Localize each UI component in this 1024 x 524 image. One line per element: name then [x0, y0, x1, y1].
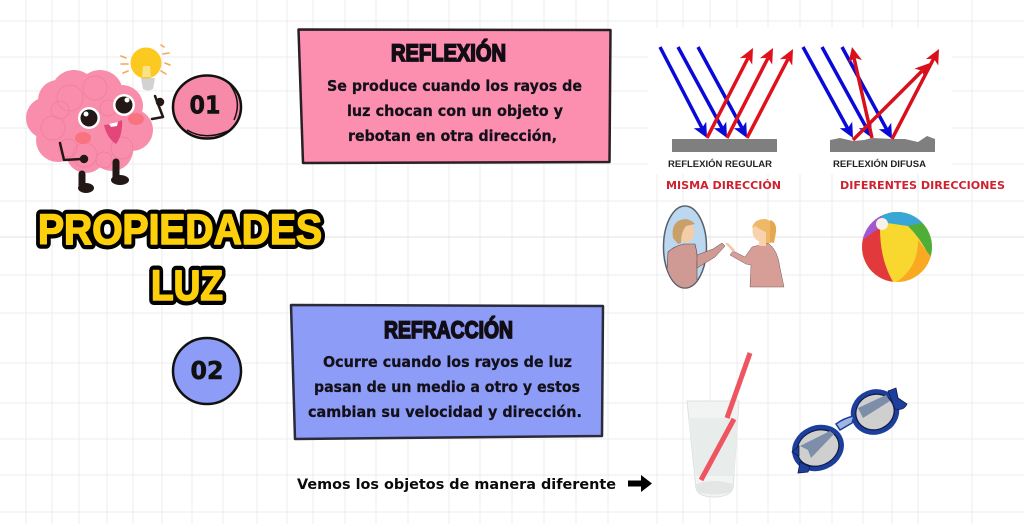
text block: reflexion: rebotan en otra dirección, — [348, 127, 557, 145]
title — [38, 206, 322, 310]
arms and legs — [60, 96, 163, 187]
diagram: regular reflection — [660, 47, 793, 170]
brain folds — [41, 76, 133, 168]
caption: vemos los objetos: Vemos los objetos de manera diferente — [297, 477, 616, 493]
icon: light bulb — [121, 45, 170, 90]
heading: reflexion: REFLEXIÓN — [391, 39, 506, 67]
text block: refraccion: Ocurre cuando los rayos de luz — [323, 353, 572, 371]
title: LUZ — [151, 262, 223, 310]
label: misma direccion: MISMA DIRECCIÓN — [666, 179, 781, 192]
arrow: to glass — [628, 475, 652, 492]
text block: refraccion: pasan de un medio a otro y estos — [314, 378, 580, 396]
diagram: diffuse reflection — [803, 47, 939, 170]
text block: refraccion: cambian su velocidad y dirección. — [308, 403, 582, 421]
text block: reflexion: Se produce cuando los rayos de — [327, 77, 582, 95]
white panel behind reflection diagrams — [648, 28, 952, 174]
face — [75, 94, 144, 144]
badge 01 — [173, 76, 241, 138]
badge 02 — [173, 338, 241, 404]
panel: reflexion — [298, 30, 610, 163]
text block: reflexion: luz chocan con un objeto y — [347, 102, 563, 120]
diagram label: REFLEXIÓN REGULAR — [668, 158, 772, 170]
mascot: pink brain with light bulb — [26, 45, 170, 193]
icon: brain body — [26, 70, 153, 173]
illustration: glass with straw — [687, 353, 750, 497]
badge 01: 01 — [190, 90, 220, 120]
illustration: beach ball — [862, 212, 932, 282]
diagram label: REFLEXIÓN DIFUSA — [833, 158, 926, 170]
panel: refraccion — [291, 305, 603, 439]
illustration: woman and mirror — [664, 206, 784, 290]
title: LUZ — [151, 262, 223, 310]
text block: refraccion — [308, 353, 582, 421]
heading: refraccion: REFRACCIÓN — [384, 316, 513, 344]
illustration: blue glasses — [788, 385, 907, 476]
label: diferentes direcciones: DIFERENTES DIRECCIONES — [840, 180, 1005, 192]
text block: reflexion — [327, 77, 582, 145]
badge 02: 02 — [190, 356, 224, 385]
title: PROPIEDADES — [38, 206, 322, 254]
title: PROPIEDADES — [38, 206, 322, 254]
